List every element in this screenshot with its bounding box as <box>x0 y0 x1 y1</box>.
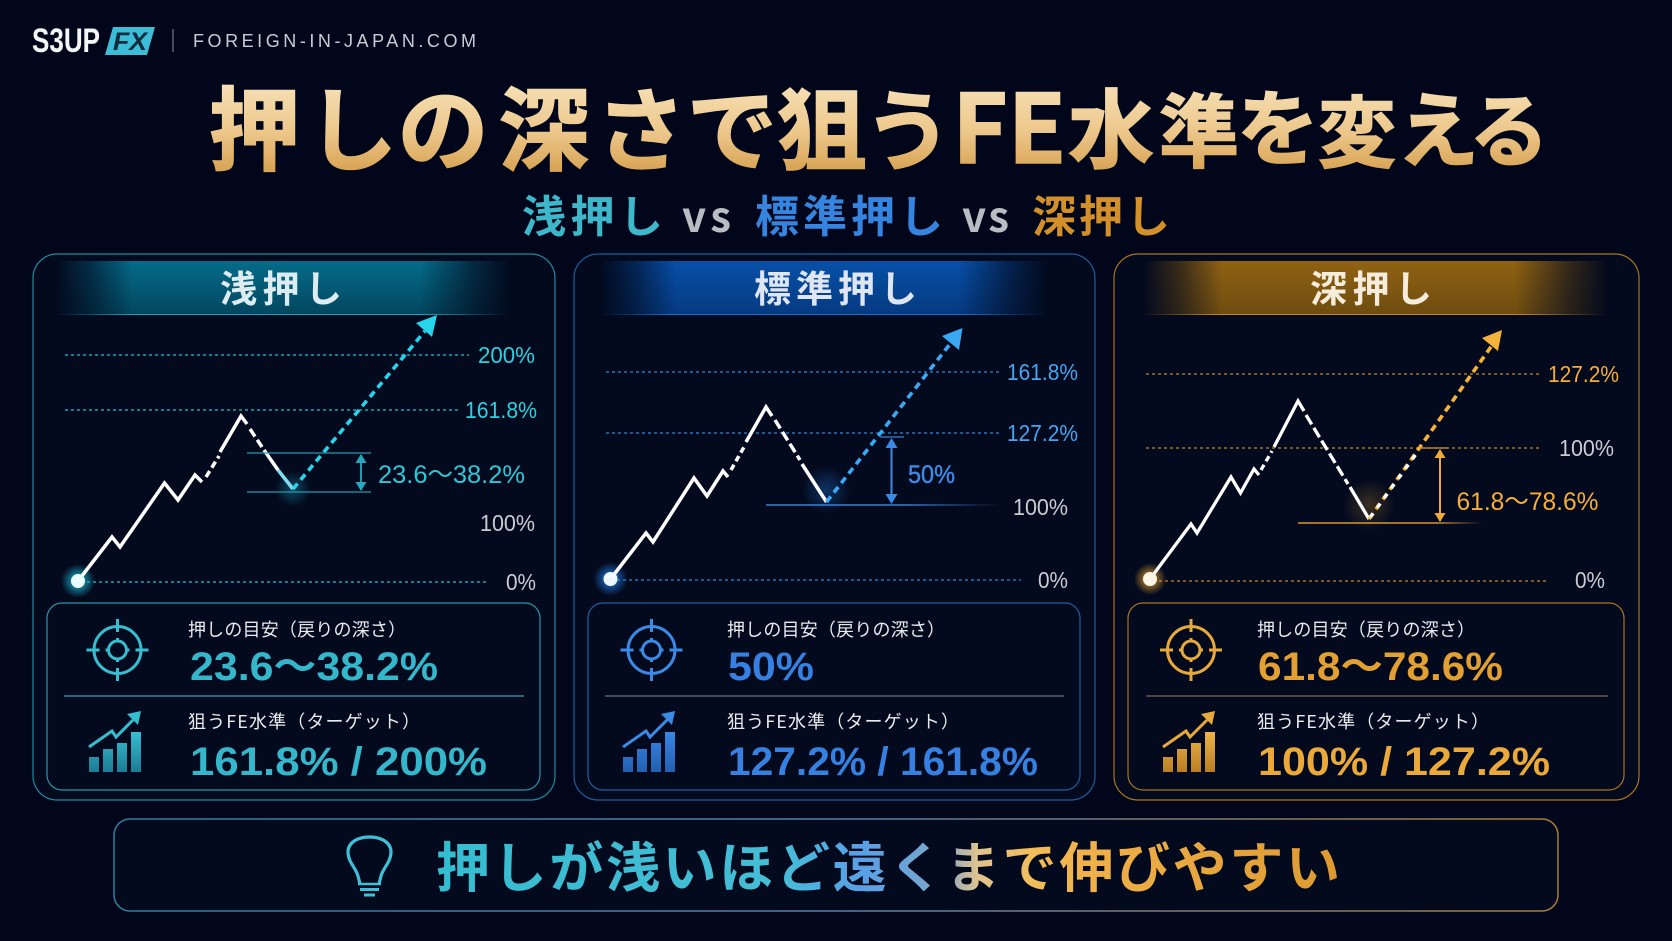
panel header: deep: 深押し <box>1310 259 1432 313</box>
value: target: 161.8% / 200% <box>190 740 487 784</box>
panel header: shallow <box>55 259 511 315</box>
panel header: standard <box>600 259 1048 315</box>
panel header: deep <box>1143 259 1608 315</box>
title: 水 <box>1068 61 1154 186</box>
takeaway text: 押しが浅いほど遠くまで伸びやすい <box>436 824 1340 903</box>
subtitle: 標準押し <box>755 181 943 245</box>
title: 変 <box>1318 72 1396 184</box>
icon: growth chart <box>623 711 675 772</box>
value: pullback: 61.8〜78.6% <box>1258 645 1503 689</box>
subtitle: 深押し <box>1032 181 1170 245</box>
title: し <box>306 58 398 190</box>
panel header: standard: 標準押し <box>754 259 917 313</box>
title: え <box>1397 65 1479 184</box>
chart: deep: 100% <box>1559 435 1614 461</box>
title: を <box>1237 63 1319 182</box>
chart: standard: 161.8% <box>1007 359 1078 385</box>
subtitle: 浅押し <box>522 181 663 245</box>
info box: deep <box>1128 603 1624 790</box>
value: target: 100% / 127.2% <box>1258 740 1550 784</box>
logo: FOREIGN-IN-JAPAN.COM <box>193 31 476 51</box>
value: target: 127.2% / 161.8% <box>728 740 1038 784</box>
logo: S3UP <box>32 22 100 60</box>
value: pullback: 50% <box>728 645 814 689</box>
title: 深 <box>498 58 590 190</box>
chart: deep <box>1134 330 1619 595</box>
text: pullback guide: 押しの目安（戻りの深さ） <box>188 616 406 642</box>
icon: target <box>86 619 148 681</box>
text: pullback guide: 押しの目安（戻りの深さ） <box>727 616 945 642</box>
title: F <box>952 54 1008 191</box>
icon: target <box>1160 619 1222 681</box>
icon: target <box>620 619 682 681</box>
chart: standard: 0% <box>1038 567 1068 593</box>
chart: standard: 100% <box>1013 494 1068 520</box>
chart: shallow: 23.6〜38.2% <box>378 461 525 489</box>
title: E <box>1008 54 1066 191</box>
subtitle: vs <box>682 184 731 245</box>
title: の <box>397 58 489 190</box>
chart: shallow: 161.8% <box>465 397 537 423</box>
panel: standard pullback <box>574 254 1095 800</box>
title: で <box>687 59 777 189</box>
chart: deep: 127.2% <box>1548 361 1619 387</box>
value: pullback: 23.6〜38.2% <box>190 645 438 689</box>
title: る <box>1469 68 1549 184</box>
takeaway banner <box>114 819 1558 911</box>
icon: growth chart <box>89 711 141 772</box>
subtitle <box>522 181 1170 245</box>
chart: shallow: 100% <box>480 510 535 536</box>
text: pullback guide: 押しの目安（戻りの深さ） <box>1257 616 1475 642</box>
logo: FX <box>113 28 148 56</box>
panel: shallow pullback <box>33 254 555 800</box>
chart: shallow <box>61 315 537 598</box>
logo <box>32 22 476 60</box>
subtitle: vs <box>962 184 1009 245</box>
title: 押 <box>209 58 300 190</box>
panel: deep pullback <box>1114 254 1639 800</box>
text: target guide: 狙うFE水準（ターゲット） <box>727 708 959 734</box>
panel header: shallow: 浅押し <box>220 259 342 313</box>
title: う <box>864 62 952 189</box>
icon: light bulb <box>348 837 391 895</box>
chart: standard: 50% <box>908 461 955 489</box>
title: さ <box>596 59 686 189</box>
info box: standard <box>588 603 1080 790</box>
text: target guide: 狙うFE水準（ターゲット） <box>1257 708 1489 734</box>
chart: deep: 0% <box>1575 567 1605 593</box>
chart: shallow: 0% <box>506 569 536 595</box>
icon: growth chart <box>1163 711 1215 772</box>
title: 狙 <box>777 59 867 189</box>
text: target guide: 狙うFE水準（ターゲット） <box>188 708 420 734</box>
chart: standard: 127.2% <box>1007 420 1078 446</box>
title: 準 <box>1159 69 1239 185</box>
info box: shallow <box>47 603 540 790</box>
chart: standard <box>594 328 1078 596</box>
chart: deep: 61.8〜78.6% <box>1456 488 1598 516</box>
chart: shallow: 200% <box>478 342 535 368</box>
